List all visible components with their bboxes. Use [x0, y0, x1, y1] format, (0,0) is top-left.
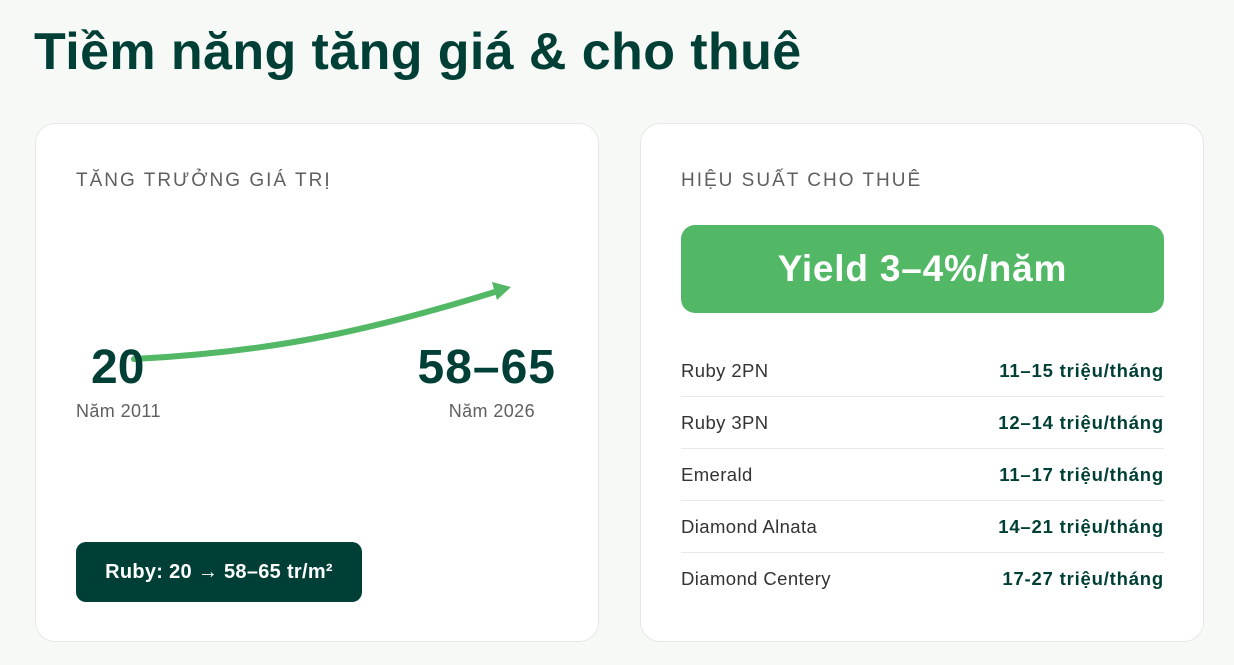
- rent table: Diamond Alnata: [681, 516, 817, 536]
- rent table: 12–14 triệu/tháng: [998, 412, 1164, 432]
- yield banner: Yield 3–4%/năm: [778, 248, 1067, 289]
- rent table: 11–15 triệu/tháng: [999, 360, 1164, 380]
- panel heading: TĂNG TRƯỞNG GIÁ TRỊ: [76, 170, 332, 191]
- rent table: Ruby 3PN: [681, 412, 769, 432]
- rent table: Ruby 2PN: [681, 360, 769, 380]
- rent table: Diamond Centery: [681, 568, 831, 589]
- chart: growth arrow: [131, 282, 511, 362]
- start value: 20: [91, 341, 144, 394]
- panel heading: HIỆU SUẤT CHO THUÊ: [681, 170, 922, 191]
- end value: 58–65: [418, 341, 556, 394]
- rent table: [681, 360, 1164, 589]
- rent table: 14–21 triệu/tháng: [998, 516, 1164, 536]
- rent table: 11–17 triệu/tháng: [999, 464, 1164, 484]
- yield banner: [681, 225, 1164, 313]
- callout badge: [76, 542, 362, 602]
- callout badge: Ruby: 20 → 58–65 tr/m²: [105, 560, 333, 582]
- panel: value growth: [35, 123, 599, 642]
- panel: rental yield: [640, 123, 1204, 642]
- title: Tiềm năng tăng giá & cho thuê: [34, 23, 802, 81]
- end year: Năm 2026: [449, 401, 535, 421]
- rent table: 17-27 triệu/tháng: [1002, 568, 1164, 589]
- rent table: Emerald: [681, 464, 753, 484]
- start year: Năm 2011: [76, 401, 161, 421]
